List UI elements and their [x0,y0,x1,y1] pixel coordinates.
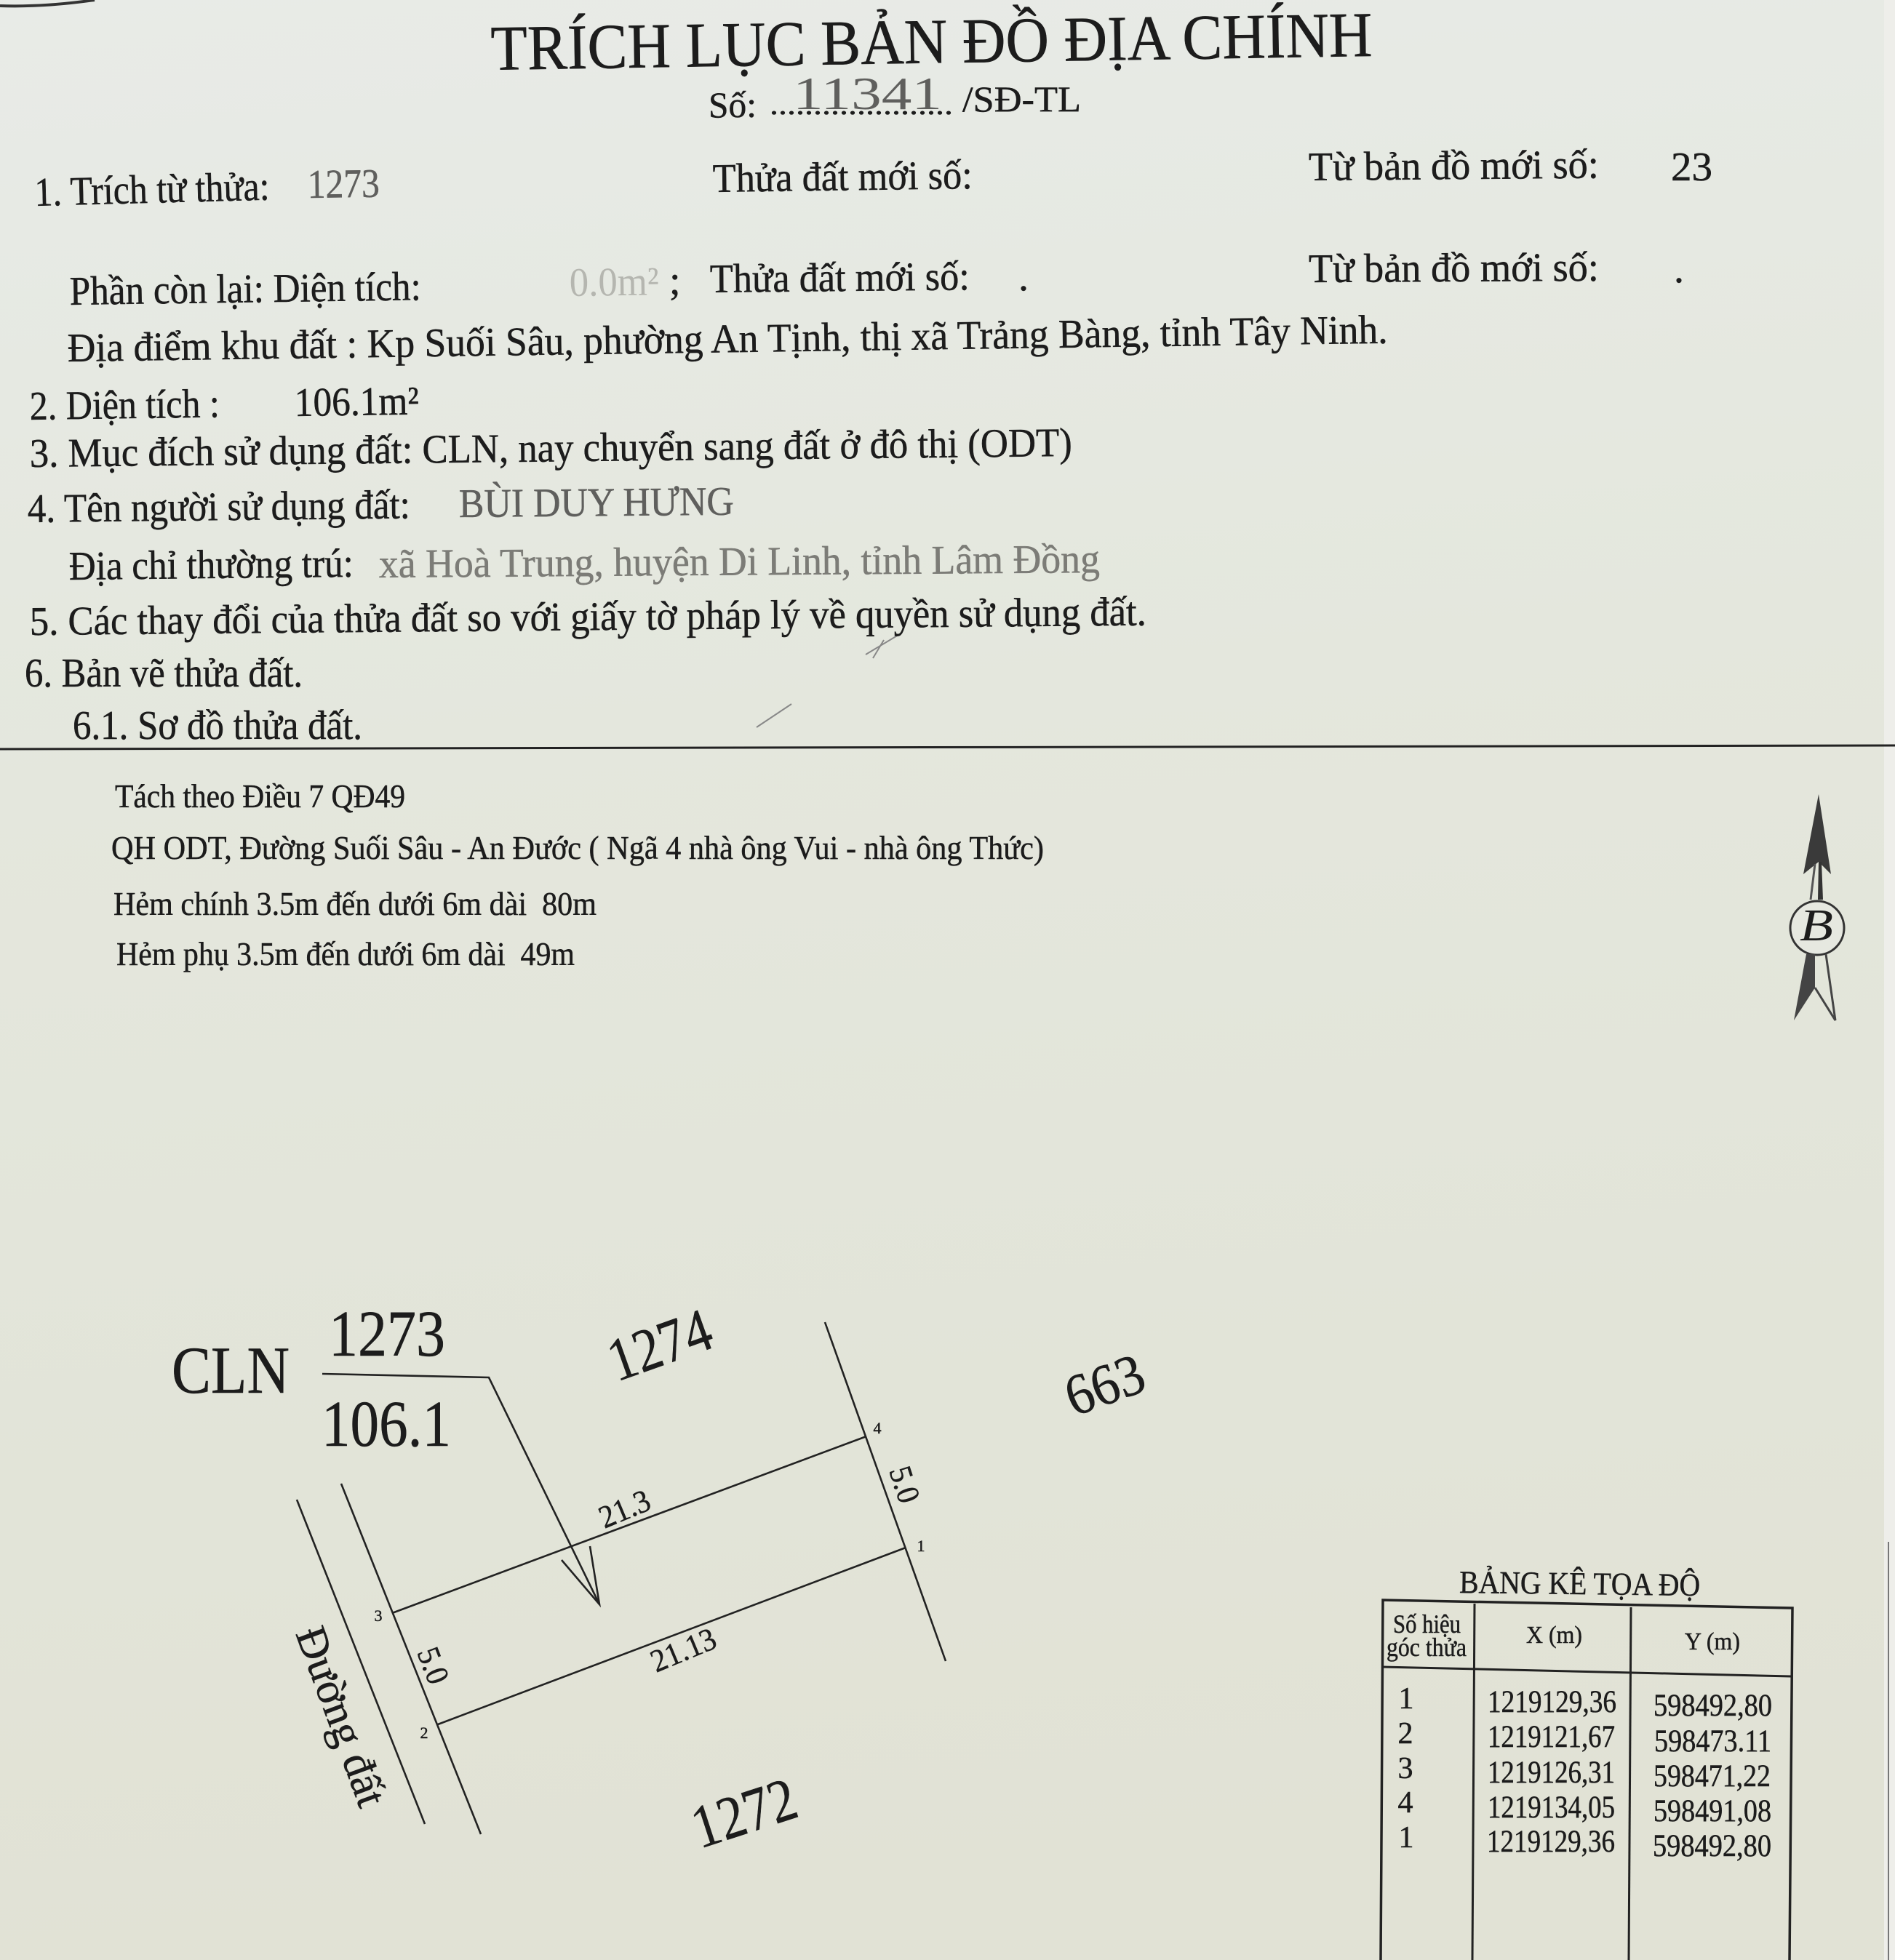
icon: north arrow: B [1800,901,1833,951]
X column: 1219129,36 [1487,1825,1615,1859]
corner column: 3 [1398,1752,1413,1785]
document number: ..................... [770,88,953,121]
location line: Địa điểm khu đất : Kp Suối Sâu, phường An Tịnh, thị xã Trảng Bàng, tỉnh Tây Ninh. [67,308,1388,371]
Y column: 598491,08 [1653,1794,1771,1828]
remaining area row: . [1674,247,1684,292]
neighbouring parcel numbers: 663 [1056,1342,1154,1429]
table header: X (m) [1526,1622,1582,1649]
remaining area row: . [1018,255,1029,300]
corner column: 2 [1398,1717,1413,1751]
edge dimensions: 5.0 [410,1642,456,1689]
map labels: parcel annotation: CLN [172,1333,290,1407]
planning notes: Tách theo Điều 7 QĐ49 [115,777,405,815]
document number: /SĐ-TL [962,79,1081,119]
document number: 11341 [793,68,942,119]
neighbouring parcel numbers: 1274 [599,1296,721,1395]
section 2: area: 106.1m² [294,379,419,425]
table header: Y (m) [1685,1628,1740,1655]
Y column [1653,1689,1772,1863]
section 5: changes: 5. Các thay đổi của thửa đất so với giấy tờ pháp lý về quyền sử dụng đất. [30,590,1146,644]
neighbouring parcel numbers [599,1296,1154,1862]
section 4: land user: 4. Tên người sử dụng đất: [27,482,410,532]
section 4: land user: Địa chỉ thường trú: [68,541,354,589]
icon: north arrow [1790,794,1844,1020]
corner numbers: 1 [917,1537,925,1555]
map labels: parcel annotation [172,1298,451,1460]
X column: 1219126,31 [1488,1756,1615,1790]
section 2: area: 2. Diện tích : [29,381,220,429]
section 1: parcel extract: 23 [1671,145,1712,190]
document number [709,68,1081,125]
remaining area row: ; [669,258,681,303]
map labels: parcel annotation: 106.1 [322,1388,451,1460]
X column: 1219129,36 [1488,1685,1616,1719]
corner column: 4 [1398,1786,1413,1820]
planning notes: QH ODT, Đường Suối Sâu - An Đước ( Ngã 4 nhà ông Vui - nhà ông Thức) [111,829,1044,866]
section 1: parcel extract: Từ bản đồ mới số: [1309,143,1599,190]
section 4: land user: xã Hoà Trung, huyện Di Linh, tỉnh Lâm Đồng [379,537,1100,587]
section 1: parcel extract [34,143,1712,215]
table title: BẢNG KÊ TỌA ĐỘ [1459,1564,1700,1603]
remaining area row: 0.0m² [569,259,659,305]
edge dimensions: 21.13 [645,1620,722,1679]
remaining area row: Phần còn lại: Diện tích: [69,264,421,314]
section 3: land use: 3. Mục đích sử dụng đất: CLN, nay chuyển sang đất ở đô thị (ODT) [29,420,1072,476]
parcel diagram [297,1322,946,1834]
edge dimensions: 21.3 [594,1482,655,1535]
X column [1487,1685,1616,1859]
X column: 1219121,67 [1488,1720,1615,1754]
Y column: 598492,80 [1653,1829,1771,1863]
coordinate table [1381,1600,1792,1960]
X column: 1219134,05 [1488,1791,1615,1825]
planning notes: Hẻm chính 3.5m đến dưới 6m dài 80m [113,885,597,922]
remaining area row: Thửa đất mới số: [709,254,970,302]
planning notes [111,777,1044,972]
section 6.1: parcel sketch: 6.1. Sơ đồ thửa đất. [73,703,362,748]
corner column: 1 [1398,1821,1414,1855]
section 1: parcel extract: 1273 [307,161,380,207]
edge dimensions [410,1462,927,1689]
corner numbers [374,1419,925,1742]
corner numbers: 4 [873,1419,882,1437]
Y column: 598471,22 [1653,1759,1771,1793]
section 2: area [29,379,419,429]
edge dimensions: 5.0 [882,1462,927,1508]
section 1: parcel extract: Thửa đất mới số: [712,153,973,201]
section 4: land user: BÙI DUY HƯNG [459,479,734,527]
table header: góc thửa [1387,1633,1467,1662]
road label: Đường đất [287,1620,396,1813]
section 4: land user [27,479,1100,589]
neighbouring parcel numbers: 1272 [683,1765,805,1862]
title: TRÍCH LỤC BẢN ĐỒ ĐỊA CHÍNH [490,0,1373,84]
corner numbers: 2 [420,1724,428,1742]
map labels: parcel annotation: 1273 [329,1298,445,1370]
section 6: parcel drawing: 6. Bản vẽ thửa đất. [25,651,303,696]
document number: Số: [709,84,757,125]
corner column [1398,1682,1414,1855]
remaining area row [69,245,1684,314]
section 1: parcel extract: 1. Trích từ thửa: [34,164,270,215]
planning notes: Hẻm phụ 3.5m đến dưới 6m dài 49m [116,935,575,972]
table header: Số hiệu [1393,1609,1461,1639]
corner numbers: 3 [374,1607,383,1625]
corner column: 1 [1398,1682,1414,1716]
table header [1387,1609,1740,1662]
Y column: 598473.11 [1654,1724,1771,1759]
remaining area row: Từ bản đồ mới số: [1309,245,1599,292]
Y column: 598492,80 [1653,1689,1772,1723]
